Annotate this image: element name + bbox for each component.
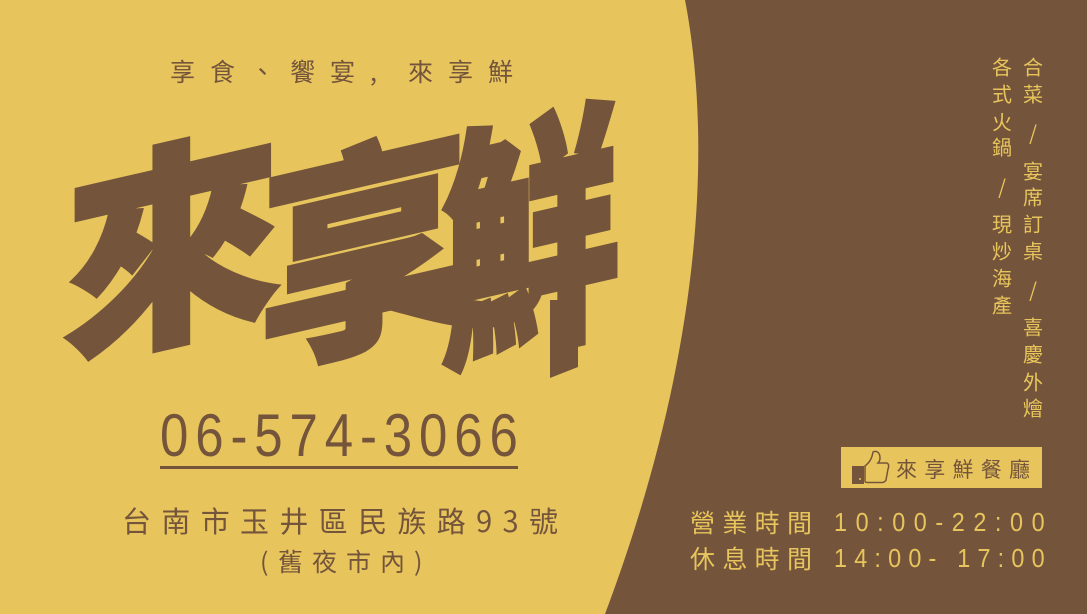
- logo: restaurant name lettering: [62, 17, 620, 427]
- tagline: 享食、饗宴,來享鮮: [170, 53, 513, 89]
- opening hours time: 10:00-22:00: [834, 509, 1045, 537]
- panel: brown curved side panel: [605, 0, 1087, 614]
- logo flourish: long tail: [550, 300, 578, 378]
- icon: thumbs up: [852, 451, 889, 484]
- break hours label: 休息時間: [690, 540, 812, 576]
- logo flourish: [388, 275, 544, 328]
- phone number: 06-574-3066: [160, 402, 518, 469]
- logo: restaurant name lettering: 鮮: [440, 17, 620, 427]
- services column: hot pot: 各式火鍋/現炒海產: [992, 52, 1012, 318]
- logo: restaurant name lettering: 來: [62, 51, 282, 414]
- break hours time: 14:00- 17:00: [834, 545, 1045, 573]
- logo: restaurant name lettering: 享: [258, 51, 471, 421]
- badge label: 來享鮮餐廳: [896, 454, 1030, 484]
- opening hours label: 營業時間: [690, 504, 812, 540]
- services column: banquet: 合菜/宴席訂桌/喜慶外燴: [1023, 52, 1043, 422]
- address note: (舊夜市內): [260, 543, 422, 579]
- badge: restaurant page: [841, 447, 1042, 488]
- phone underline: [160, 466, 518, 469]
- address: 台南市玉井區民族路93號: [122, 499, 558, 541]
